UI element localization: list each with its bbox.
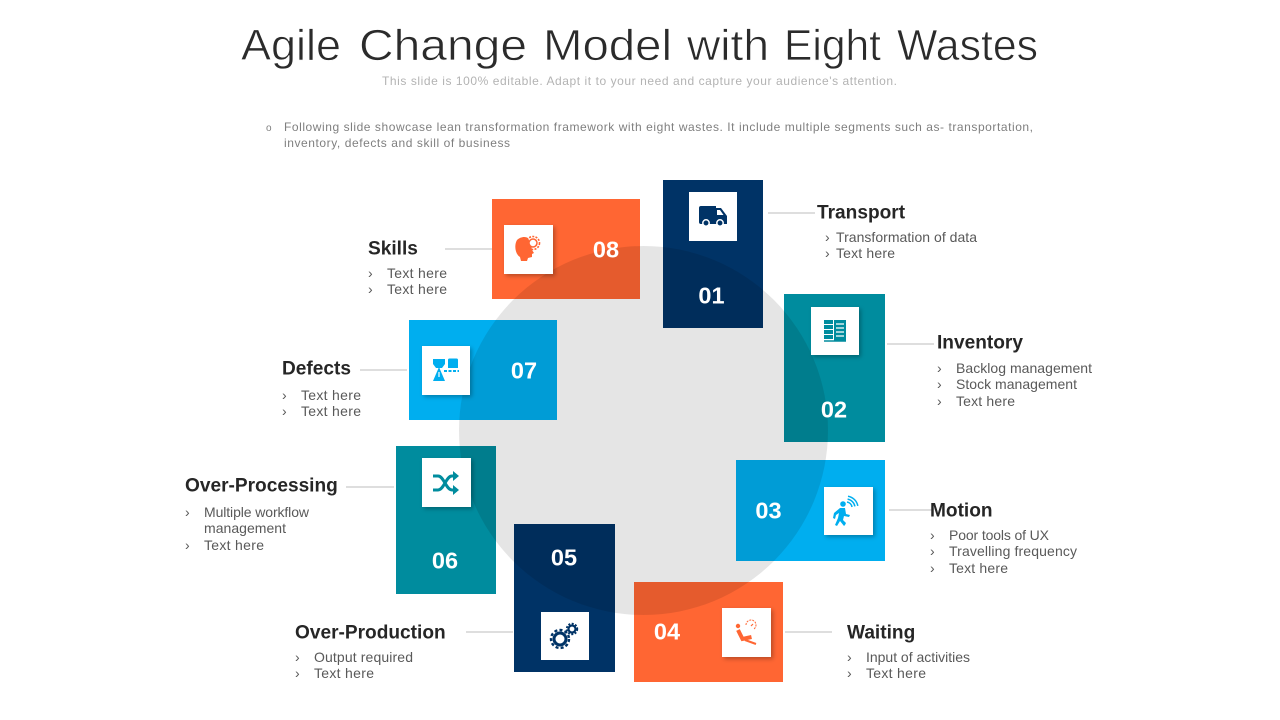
label: Skills: Text here [387, 281, 447, 297]
label: Over-Processing: › [185, 504, 190, 520]
label: Defects: Text here [301, 387, 361, 403]
icon: walking person with signal [824, 487, 873, 535]
number 04: 04 [654, 618, 680, 644]
label: Over-Processing: Over-Processing [185, 476, 338, 496]
description text block: o [266, 123, 272, 134]
icon: shuffle arrows [422, 458, 471, 507]
label: Inventory: Text here [956, 393, 1015, 409]
label: Defects: Defects [282, 358, 351, 380]
icon: truck [689, 192, 737, 241]
label: Over-Processing: Text here [204, 537, 264, 553]
label: Over-Processing: management [204, 520, 286, 536]
number 08: 08 [593, 236, 619, 262]
label: Over-Production [295, 622, 513, 681]
title: Change [359, 21, 527, 70]
label: Defects: › [282, 403, 287, 419]
label: Inventory: › [937, 376, 942, 392]
label: Motion: Text here [949, 560, 1008, 576]
title: Model [543, 21, 672, 70]
icon: inventory checklist [811, 307, 859, 355]
number 01: 01 [698, 282, 725, 308]
label: Transport: › [825, 245, 830, 261]
number 07: 07 [511, 358, 537, 384]
icon: head with gear [504, 225, 553, 274]
label: Transport: › [825, 229, 830, 245]
description text block: Following slide showcase lean transformation framework with eight wastes. It include multiple segments such as- transportation, [284, 120, 1033, 134]
label: Over-Processing: › [185, 537, 190, 553]
label: Skills: › [368, 265, 373, 281]
label: Over-Production: Text here [314, 665, 374, 681]
central circle [459, 246, 828, 615]
label: Skills: › [368, 281, 373, 297]
title: Agile [241, 21, 341, 70]
description text block [266, 120, 1033, 150]
label: Defects [282, 358, 407, 419]
title [241, 21, 1038, 70]
label: Skills [368, 238, 492, 297]
label: Motion: Poor tools of UX [949, 527, 1050, 543]
label: Waiting: › [847, 649, 852, 665]
label: Transport [768, 202, 977, 261]
title: with [686, 21, 769, 70]
label: Motion: › [930, 543, 935, 559]
label: Transport: Transport [817, 202, 906, 224]
label: Waiting [785, 622, 970, 681]
label: Inventory: › [937, 360, 942, 376]
label: Skills: Skills [368, 238, 418, 260]
label: Motion: Travelling frequency [949, 543, 1077, 559]
label: Inventory: › [937, 393, 942, 409]
icon: defects machine with warning [422, 346, 470, 395]
segment tiles [396, 180, 885, 682]
number 06: 06 [432, 548, 458, 574]
number 05: 05 [551, 544, 577, 570]
icon: waiting seat with clock [722, 608, 771, 657]
label: Inventory: Inventory [937, 332, 1023, 354]
label: Transport: Transformation of data [836, 229, 977, 245]
label: Defects: › [282, 387, 287, 403]
label: Over-Production: Over-Production [295, 622, 446, 644]
label: Motion: Motion [930, 500, 993, 522]
description text block: inventory, defects and skill of business [284, 136, 510, 150]
label: Motion: › [930, 527, 935, 543]
label: Motion: › [930, 560, 935, 576]
label: Inventory: Stock management [956, 376, 1077, 392]
label: Over-Production: Output required [314, 649, 413, 665]
label: Inventory: Backlog management [956, 360, 1092, 376]
label: Over-Production: › [295, 649, 300, 665]
label: Over-Processing: Multiple workflow [204, 504, 310, 520]
label: Waiting: Text here [866, 665, 926, 681]
label: Waiting: › [847, 665, 852, 681]
subtitle: This slide is 100% editable. Adapt it to your need and capture your audience's attention. [382, 74, 897, 88]
number 03: 03 [755, 498, 782, 524]
title: Wastes [897, 21, 1038, 70]
label: Inventory [887, 332, 1092, 409]
label: Over-Processing [185, 476, 394, 553]
title: Eight [784, 21, 881, 70]
label: Waiting: Waiting [847, 622, 915, 644]
label: Defects: Text here [301, 403, 361, 419]
label: Transport: Text here [836, 245, 895, 261]
label: Waiting: Input of activities [866, 649, 970, 665]
label: Skills: Text here [387, 265, 447, 281]
label: Over-Production: › [295, 665, 300, 681]
icon: gears [541, 612, 589, 660]
number 02: 02 [821, 396, 847, 422]
label: Motion [889, 500, 1077, 576]
